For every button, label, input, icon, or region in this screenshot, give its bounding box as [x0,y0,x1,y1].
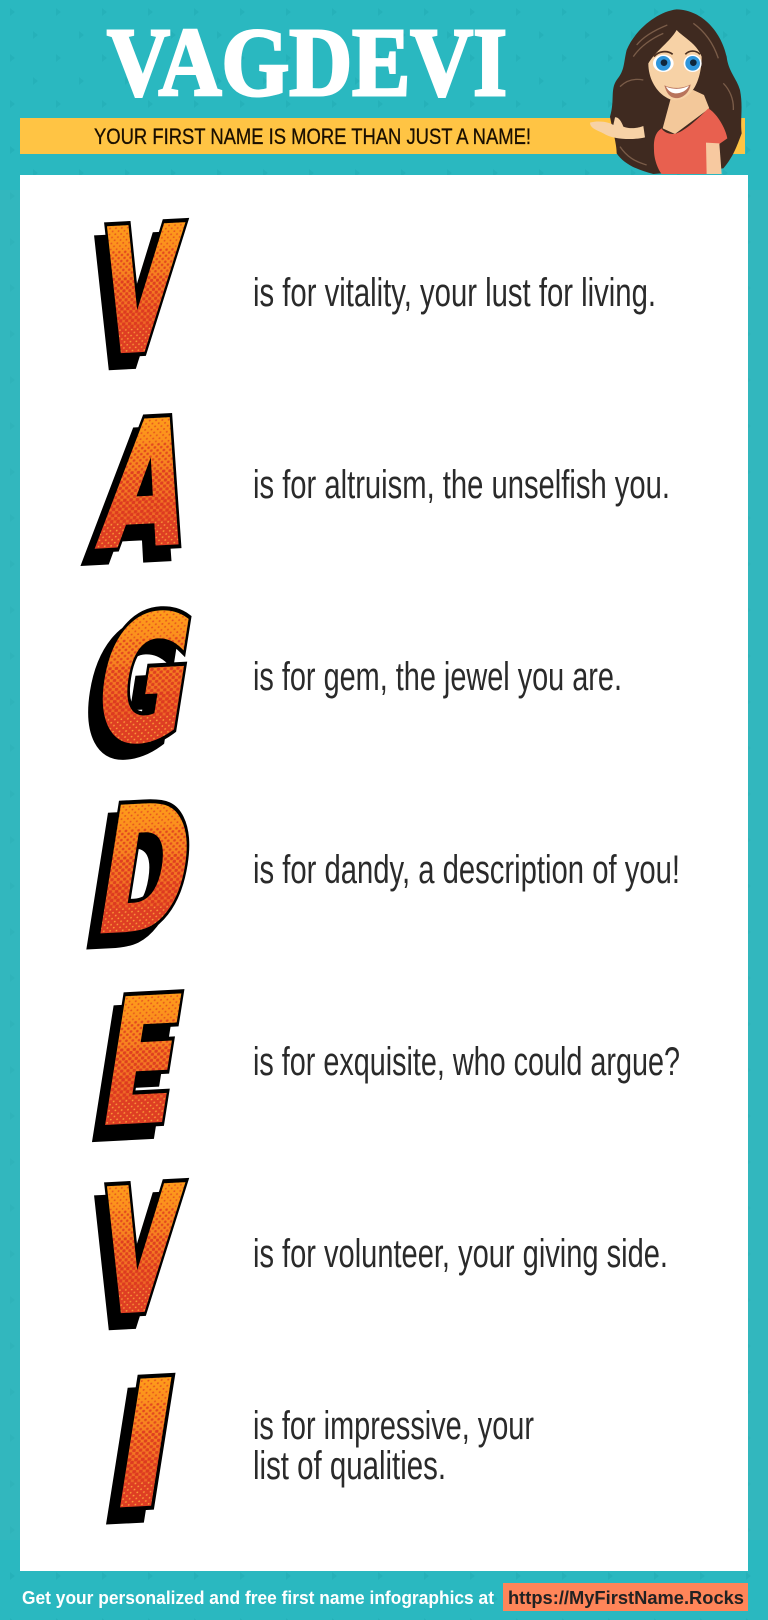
letter V outline: V [91,1151,187,1352]
letter G outline: G [85,579,204,782]
letter D [75,770,204,984]
icon: cartoon woman [590,9,742,174]
letter E shadow: E [81,976,183,1176]
letter G [73,579,204,794]
smile [664,84,691,98]
text: I [253,1404,534,1488]
arm [706,143,722,174]
letter V [81,191,187,405]
letter I outline: I [103,1346,187,1546]
letter E [81,963,193,1176]
letter D face: D [86,770,204,972]
letter A face: A [90,385,202,587]
shirt [654,108,727,174]
letter I face: I [103,1346,187,1546]
hair [610,9,742,174]
title: VAGDEVI [107,9,507,117]
letter G face: G [85,579,204,782]
letter D outline: D [86,770,204,972]
hair highlights [620,23,733,165]
neck [663,90,709,134]
subtitle banner [20,118,745,154]
letter G shadow: G [73,591,192,794]
hand [590,117,645,139]
eyes [653,51,702,72]
footer text: Get your personalized and free first name infographics at [22,1588,494,1608]
letter E outline: E [91,963,193,1163]
letter A [80,385,202,600]
text: I: is for impressive, your [253,1404,534,1448]
subtitle banner: YOUR FIRST NAME IS MORE THAN JUST A NAME! [94,124,531,149]
letter D shadow: D [75,782,193,984]
letter V outline: V [91,191,187,392]
letter E face: E [91,963,193,1163]
letter V face: V [91,191,187,392]
letter I [93,1346,187,1559]
letter I shadow: I [93,1359,177,1559]
text: G: is for gem, the jewel you are. [253,655,622,699]
text: I: list of qualities. [253,1444,446,1488]
face [648,30,702,100]
footer url badge [503,1583,748,1611]
letter A shadow: A [80,398,192,600]
letter V [81,1151,187,1365]
letter V shadow: V [81,204,177,405]
letter V face: V [91,1151,187,1352]
footer url badge: https://MyFirstName.Rocks [508,1588,744,1608]
letter A outline: A [90,385,202,587]
letter V shadow: V [81,1164,177,1365]
